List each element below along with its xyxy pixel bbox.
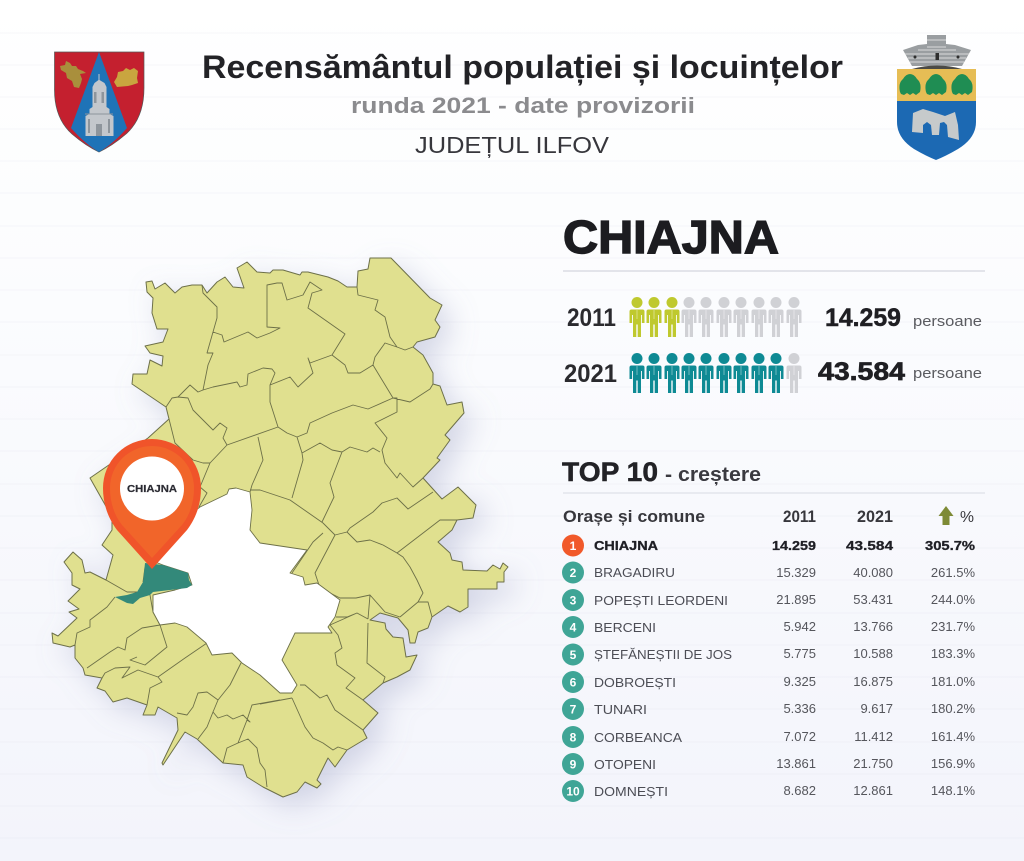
row 10 xyxy=(562,780,975,802)
row 7 xyxy=(562,698,975,720)
map: county outline xyxy=(52,258,508,797)
pictogram 2021 xyxy=(630,353,802,393)
row 5: 10.588 xyxy=(853,646,893,661)
row 3: 3 xyxy=(570,594,577,608)
map: commune borders xyxy=(75,282,457,787)
heading: commune name: CHIAJNA xyxy=(563,211,779,263)
county name: JUDEȚUL ILFOV xyxy=(415,132,610,158)
row 4: 231.7% xyxy=(931,619,975,634)
pin label: CHIAJNA xyxy=(127,483,177,495)
unit: persoane xyxy=(913,365,982,382)
table: top 10 growth xyxy=(562,506,975,802)
row 5: 5.775 xyxy=(783,646,816,661)
row 1: CHIAJNA xyxy=(594,538,659,553)
panel: population 2021 xyxy=(564,353,982,393)
row 2 xyxy=(562,562,975,584)
row 2: 40.080 xyxy=(853,565,893,580)
map: Bucharest white area xyxy=(150,488,340,693)
row 3: POPEȘTI LEORDENI xyxy=(594,593,728,608)
row 6: 16.875 xyxy=(853,674,893,689)
row 8: CORBEANCA xyxy=(594,730,682,745)
pictogram 2011 xyxy=(630,297,802,337)
row 5: ȘTEFĂNEȘTII DE JOS xyxy=(594,647,732,662)
row 8: 8 xyxy=(570,730,577,744)
row 9: 21.750 xyxy=(853,756,893,771)
row 3: 244.0% xyxy=(931,592,975,607)
row 5 xyxy=(562,644,975,666)
row 1 xyxy=(562,534,975,556)
row 4: 13.766 xyxy=(853,619,893,634)
row 8: 161.4% xyxy=(931,729,975,744)
title: Recensământul populației și locuințelor xyxy=(202,49,843,85)
row 2: 15.329 xyxy=(776,565,816,580)
value 2021: 43.584 xyxy=(818,358,905,386)
row 7: 5.336 xyxy=(783,701,816,716)
row 4: 5.942 xyxy=(783,619,816,634)
row 4: BERCENI xyxy=(594,620,656,635)
table header: 2021 xyxy=(857,507,893,526)
table header: % xyxy=(960,509,974,526)
row 7: 180.2% xyxy=(931,701,975,716)
year 2011: 2011 xyxy=(567,304,616,332)
row 9: 13.861 xyxy=(776,756,816,771)
row 9: OTOPENI xyxy=(594,757,656,772)
row 1: 305.7% xyxy=(925,538,975,553)
row 4 xyxy=(562,616,975,638)
row 9 xyxy=(562,753,975,775)
heading: top 10: TOP 10 xyxy=(562,457,658,487)
heading: top 10: - creștere xyxy=(665,464,761,486)
icon: Ilfov county coat of arms xyxy=(54,52,144,152)
panel: map of Ilfov county xyxy=(52,258,508,797)
row 8: 7.072 xyxy=(783,729,816,744)
row 9: 9 xyxy=(570,758,577,772)
row 2: 261.5% xyxy=(931,565,975,580)
row 6 xyxy=(562,671,975,693)
unit: persoane xyxy=(913,313,982,330)
row 1: 1 xyxy=(570,539,577,553)
row 7: 7 xyxy=(570,702,577,716)
row 5: 5 xyxy=(570,648,577,662)
subtitle: runda 2021 - date provizorii xyxy=(351,93,695,118)
panel: population 2011 xyxy=(567,297,982,337)
row 2: BRAGADIRU xyxy=(594,565,675,580)
row 10: 148.1% xyxy=(931,783,975,798)
icon: up arrow xyxy=(938,506,954,525)
row 8: 11.412 xyxy=(854,729,893,744)
row 3 xyxy=(562,589,975,611)
row 10: 12.861 xyxy=(853,783,893,798)
value 2011: 14.259 xyxy=(825,304,901,332)
row 7: 9.617 xyxy=(860,701,893,716)
row 6: DOBROEȘTI xyxy=(594,675,676,690)
row 1: 43.584 xyxy=(846,538,894,553)
row 7: TUNARI xyxy=(594,702,647,717)
row 10: 10 xyxy=(566,784,580,798)
row 9: 156.9% xyxy=(931,756,975,771)
table header: 2011 xyxy=(783,507,816,526)
row 8 xyxy=(562,726,975,748)
icon: Chiajna coat of arms xyxy=(897,35,976,160)
row 4: 4 xyxy=(570,620,577,634)
row 3: 21.895 xyxy=(776,592,816,607)
table header xyxy=(563,506,974,526)
row 2: 2 xyxy=(570,566,577,580)
row 6: 181.0% xyxy=(931,674,975,689)
row 5: 183.3% xyxy=(931,646,975,661)
map: pin xyxy=(103,439,201,569)
heading: top 10 xyxy=(562,457,761,487)
row 6: 6 xyxy=(570,676,577,690)
year 2021: 2021 xyxy=(564,360,617,388)
row 3: 53.431 xyxy=(853,592,893,607)
map: Chiajna highlighted xyxy=(115,563,192,604)
row 10: 8.682 xyxy=(783,783,816,798)
row 10: DOMNEȘTI xyxy=(594,784,668,799)
row 6: 9.325 xyxy=(783,674,816,689)
table header: Orașe și comune xyxy=(563,507,705,526)
row 1: 14.259 xyxy=(772,538,816,553)
